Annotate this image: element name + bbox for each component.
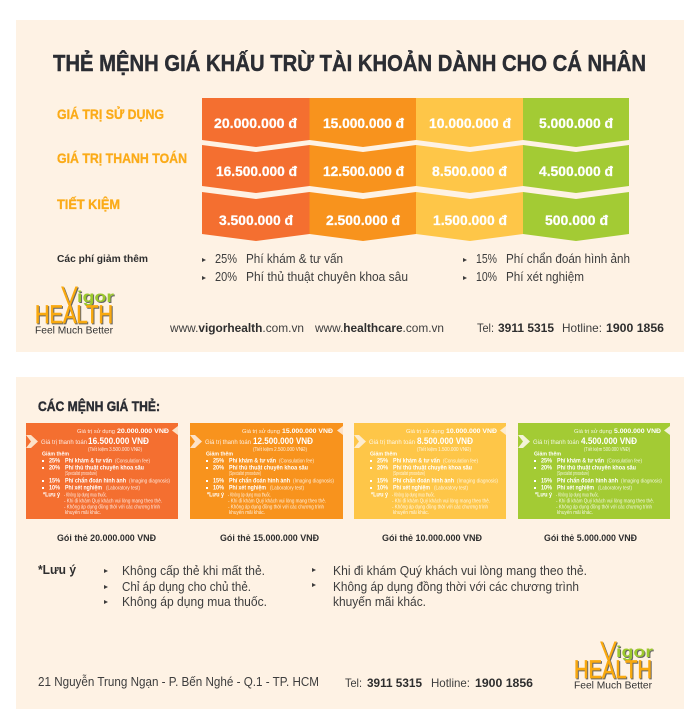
notes: left column: Chỉ áp dụng cho chủ thẻ. xyxy=(122,580,251,594)
card: 10.000.000: 8.500.000 VNĐ xyxy=(417,436,473,447)
card: 5.000.000: 20% xyxy=(541,466,553,472)
column: 15.000.000: 12.500.000 đ xyxy=(323,163,404,179)
card: 15.000.000: (Laboratory test) xyxy=(270,486,304,492)
card: 10.000.000: Phí chẩn đoán hình ảnh xyxy=(393,478,454,484)
value table: column ribbons xyxy=(202,98,629,241)
card: 20.000.000: (Specialist procedure) xyxy=(65,471,97,477)
notes label: *Lưu ý xyxy=(38,563,76,577)
card: 5.000.000: Phí xét nghiệm xyxy=(557,486,594,492)
card: 5.000.000: 25% xyxy=(541,458,553,464)
phone contacts: Hotline: xyxy=(562,321,602,335)
notes: right column xyxy=(312,564,587,609)
card caption: 10.000.000: Gói thẻ 10.000.000 VNĐ xyxy=(382,533,482,544)
phone contacts: 3911 5315 xyxy=(367,676,422,690)
card: 20.000.000: Giá trị sử dụng xyxy=(77,428,115,435)
card: 20.000.000: 20% xyxy=(49,466,61,472)
card: 10.000.000: Phí khám & tư vấn xyxy=(393,458,440,464)
notes: left column: Không áp dụng mua thuốc. xyxy=(122,595,267,609)
websites xyxy=(169,323,444,335)
card: 20.000.000: - Không áp dụng đồng thời với các chương trình xyxy=(64,504,160,510)
heading: CÁC MỆNH GIÁ THẺ: xyxy=(38,397,160,414)
extra discounts list: Phí xét nghiệm xyxy=(506,270,584,284)
card: 10.000.000: Phí thủ thuật chuyên khoa sâu xyxy=(393,466,472,472)
column: 5.000.000 xyxy=(523,98,629,241)
address: 21 Nguyễn Trung Ngạn - P. Bến Nghé - Q.1 - TP. HCM xyxy=(38,674,319,689)
phone contacts: 1900 1856 xyxy=(606,321,664,335)
card: 10.000.000: *Lưu ý xyxy=(371,492,389,498)
card: 10.000.000: 10% xyxy=(377,486,389,492)
card: 5.000.000: (Imaging diagnosis) xyxy=(621,478,662,484)
card: 10.000.000: 10.000.000 VNĐ xyxy=(446,429,498,435)
phone contacts xyxy=(477,321,664,335)
card: 5.000.000: (Consulation fee) xyxy=(607,458,642,464)
card: 5.000.000 xyxy=(518,423,670,519)
card: 15.000.000: (Specialist procedure) xyxy=(229,471,261,477)
card: 10.000.000: Giá trị thanh toán xyxy=(369,440,415,446)
card: 15.000.000: - Không áp dụng mua thuốc. xyxy=(228,492,271,498)
panel: individual card values xyxy=(16,20,684,352)
card: 20.000.000: - Không áp dụng mua thuốc. xyxy=(64,492,107,498)
card: 15.000.000: 15% xyxy=(213,478,225,484)
extra discounts list: 10% xyxy=(476,270,497,284)
card: 5.000.000: (Specialist procedure) xyxy=(557,471,589,477)
column: 20.000.000: 16.500.000 đ xyxy=(216,163,297,179)
card: 10.000.000: - Khi đi khám Quý khách vui lòng mang theo thẻ. xyxy=(392,498,490,504)
card: 20.000.000: khuyến mãi khác. xyxy=(65,510,101,516)
phone contacts: Tel: xyxy=(345,676,362,690)
row labels: TIẾT KIỆM xyxy=(57,197,120,212)
phone contacts: Tel: xyxy=(477,321,494,335)
column: 5.000.000: 500.000 đ xyxy=(545,212,608,228)
logo: Vigor Health: HEALTH xyxy=(574,656,652,684)
card: 20.000.000 xyxy=(26,423,178,519)
card: 5.000.000: 5.000.000 VNĐ xyxy=(614,429,662,435)
card: 10.000.000: 15% xyxy=(377,478,389,484)
row labels: GIÁ TRỊ THANH TOÁN xyxy=(57,151,187,166)
card: 20.000.000: 25% xyxy=(49,458,61,464)
extra discounts list: 20% xyxy=(215,270,237,284)
card: 5.000.000: Phí thủ thuật chuyên khoa sâu xyxy=(557,466,636,472)
notes: right column: Khi đi khám Quý khách vui lòng mang theo thẻ. xyxy=(333,564,587,578)
card: 15.000.000 xyxy=(190,423,343,519)
extra discounts list: 25% xyxy=(215,252,237,266)
websites: www.vigorhealth.com.vn xyxy=(169,323,304,335)
card caption: 15.000.000: Gói thẻ 15.000.000 VNĐ xyxy=(220,533,319,544)
card: 20.000.000: 15% xyxy=(49,478,61,484)
card: 10.000.000 xyxy=(354,423,506,519)
card: 10.000.000: 25% xyxy=(377,458,389,464)
card: 15.000.000: 25% xyxy=(213,458,225,464)
card: 5.000.000: - Không áp dụng mua thuốc. xyxy=(556,492,599,498)
websites: www.healthcare.com.vn xyxy=(314,323,444,335)
column: 5.000.000: 4.500.000 đ xyxy=(539,163,613,179)
card: 5.000.000: *Lưu ý xyxy=(535,492,553,498)
extra discounts list: Phí khám & tư vấn xyxy=(246,252,343,266)
column: 20.000.000: 20.000.000 đ xyxy=(214,115,297,131)
card: 5.000.000: (Laboratory test) xyxy=(598,486,632,492)
card: 10.000.000: 20% xyxy=(377,466,389,472)
card: 20.000.000: Phí chẩn đoán hình ảnh xyxy=(65,478,126,484)
card: 10.000.000: (Consulation fee) xyxy=(443,458,478,464)
column: 5.000.000: 5.000.000 đ xyxy=(539,115,613,131)
extra discounts heading: Các phí giảm thêm xyxy=(57,253,148,265)
card: 10.000.000: (Imaging diagnosis) xyxy=(457,478,498,484)
card: 20.000.000: (Tiết kiệm 3.500.000 VNĐ) xyxy=(88,447,142,453)
card caption: 20.000.000: Gói thẻ 20.000.000 VNĐ xyxy=(57,533,156,544)
logo: Vigor Health: igor xyxy=(616,644,653,661)
card: 20.000.000: (Laboratory test) xyxy=(106,486,140,492)
card: 20.000.000: Phí xét nghiệm xyxy=(65,486,102,492)
card: 20.000.000: Giảm thêm xyxy=(42,452,69,458)
card: 15.000.000: 10% xyxy=(213,486,225,492)
column: 15.000.000 xyxy=(310,98,416,241)
phone contacts: Hotline: xyxy=(431,676,470,690)
card: 15.000.000: Phí chẩn đoán hình ảnh xyxy=(229,478,290,484)
card: 15.000.000: Giá trị thanh toán xyxy=(205,440,251,446)
card: 20.000.000: *Lưu ý xyxy=(43,492,61,498)
card: 20.000.000: 10% xyxy=(49,486,61,492)
card: 15.000.000: Phí khám & tư vấn xyxy=(229,458,276,464)
card: 5.000.000: 10% xyxy=(541,486,553,492)
card caption: 5.000.000: Gói thẻ 5.000.000 VNĐ xyxy=(544,533,637,544)
column: 20.000.000 xyxy=(202,98,310,241)
card: 15.000.000: 20% xyxy=(213,466,225,472)
card: 20.000.000: - Khi đi khám Quý khách vui lòng mang theo thẻ. xyxy=(64,498,162,504)
panel: card denominations xyxy=(16,377,684,709)
card: 10.000.000: Giá trị sử dụng xyxy=(406,428,444,435)
card: 10.000.000: Giảm thêm xyxy=(370,452,397,458)
card: 15.000.000: - Không áp dụng đồng thời với các chương trình xyxy=(228,504,324,510)
notes: left column: Không cấp thẻ khi mất thẻ. xyxy=(122,564,265,578)
card: 15.000.000: khuyến mãi khác. xyxy=(229,510,265,516)
logo: Vigor Health: HEALTH xyxy=(35,301,113,329)
card: 15.000.000: (Consulation fee) xyxy=(279,458,314,464)
column: 10.000.000: 1.500.000 đ xyxy=(433,212,507,228)
logo: Vigor Health: V xyxy=(600,636,617,666)
card: 15.000.000: Giảm thêm xyxy=(206,452,233,458)
card: 10.000.000: khuyến mãi khác. xyxy=(393,510,429,516)
notes: left column xyxy=(104,564,267,609)
extra discounts list: 15% xyxy=(476,252,497,266)
logo: Vigor Health: V xyxy=(61,281,78,311)
column: 15.000.000: 2.500.000 đ xyxy=(326,212,400,228)
card: 15.000.000: *Lưu ý xyxy=(207,492,225,498)
card: 20.000.000: Phí khám & tư vấn xyxy=(65,458,112,464)
card: 10.000.000: - Không áp dụng đồng thời với các chương trình xyxy=(392,504,488,510)
card: 10.000.000: (Laboratory test) xyxy=(434,486,468,492)
card: 5.000.000: 4.500.000 VNĐ xyxy=(581,436,637,447)
notes: right column: Không áp dụng đồng thời với các chương trình xyxy=(333,580,579,594)
card: 15.000.000: (Tiết kiệm 2.500.000 VNĐ) xyxy=(253,447,307,453)
card: 5.000.000: Giá trị thanh toán xyxy=(533,440,579,446)
card: 15.000.000: - Khi đi khám Quý khách vui lòng mang theo thẻ. xyxy=(228,498,326,504)
column: 20.000.000: 3.500.000 đ xyxy=(219,212,293,228)
logo: Vigor Health: igor xyxy=(77,289,114,306)
card: 15.000.000: 15.000.000 VNĐ xyxy=(282,429,334,435)
notes: right column: khuyến mãi khác. xyxy=(333,595,426,609)
card: 20.000.000: (Imaging diagnosis) xyxy=(129,478,170,484)
extra discounts list: Phí thủ thuật chuyên khoa sâu xyxy=(246,270,408,284)
logo: Vigor Health: Feel Much Better xyxy=(574,680,653,692)
logo: Vigor Health: Feel Much Better xyxy=(35,326,114,336)
logo: Vigor Health xyxy=(35,281,114,336)
card: 15.000.000: Phí xét nghiệm xyxy=(229,486,266,492)
extra discounts list: Phí chẩn đoán hình ảnh xyxy=(506,252,630,266)
card: 10.000.000: Phí xét nghiệm xyxy=(393,486,430,492)
card: 5.000.000: Giảm thêm xyxy=(534,452,561,458)
card: 20.000.000: 20.000.000 VNĐ xyxy=(117,429,170,435)
card: 5.000.000: 15% xyxy=(541,478,553,484)
card: 10.000.000: - Không áp dụng mua thuốc. xyxy=(392,492,435,498)
card: 5.000.000: Phí chẩn đoán hình ảnh xyxy=(557,478,618,484)
phone contacts: 3911 5315 xyxy=(498,321,554,335)
card: 5.000.000: (Tiết kiệm 500.000 VNĐ) xyxy=(584,447,630,453)
card: 20.000.000: Phí thủ thuật chuyên khoa sâu xyxy=(65,466,144,472)
card: 15.000.000: 12.500.000 VNĐ xyxy=(253,436,313,447)
column: 10.000.000: 10.000.000 đ xyxy=(429,115,511,131)
column: 15.000.000: 15.000.000 đ xyxy=(323,115,404,131)
card: 5.000.000: khuyến mãi khác. xyxy=(557,510,593,516)
column: 10.000.000 xyxy=(416,98,523,241)
card: 15.000.000: Giá trị sử dụng xyxy=(242,428,280,435)
column: 10.000.000: 8.500.000 đ xyxy=(432,163,507,179)
card: 20.000.000: 16.500.000 VNĐ xyxy=(88,436,149,447)
card: 5.000.000: Giá trị sử dụng xyxy=(574,428,612,435)
logo: Vigor Health xyxy=(574,636,653,692)
card: 20.000.000: (Consulation fee) xyxy=(115,458,150,464)
phone contacts xyxy=(345,676,533,690)
card: 10.000.000: (Specialist procedure) xyxy=(393,471,425,477)
card: 5.000.000: - Không áp dụng đồng thời với các chương trình xyxy=(556,504,652,510)
card: 20.000.000: Giá trị thanh toán xyxy=(41,440,87,446)
card: 15.000.000: (Imaging diagnosis) xyxy=(293,478,334,484)
row labels xyxy=(57,107,187,212)
card: 5.000.000: Phí khám & tư vấn xyxy=(557,458,604,464)
extra discounts list xyxy=(202,252,630,284)
phone contacts: 1900 1856 xyxy=(475,676,533,690)
card: 10.000.000: (Tiết kiệm 1.500.000 VNĐ) xyxy=(417,447,471,453)
row labels: GIÁ TRỊ SỬ DỤNG xyxy=(57,107,164,122)
card: 15.000.000: Phí thủ thuật chuyên khoa sâu xyxy=(229,466,308,472)
card: 5.000.000: - Khi đi khám Quý khách vui lòng mang theo thẻ. xyxy=(556,498,654,504)
